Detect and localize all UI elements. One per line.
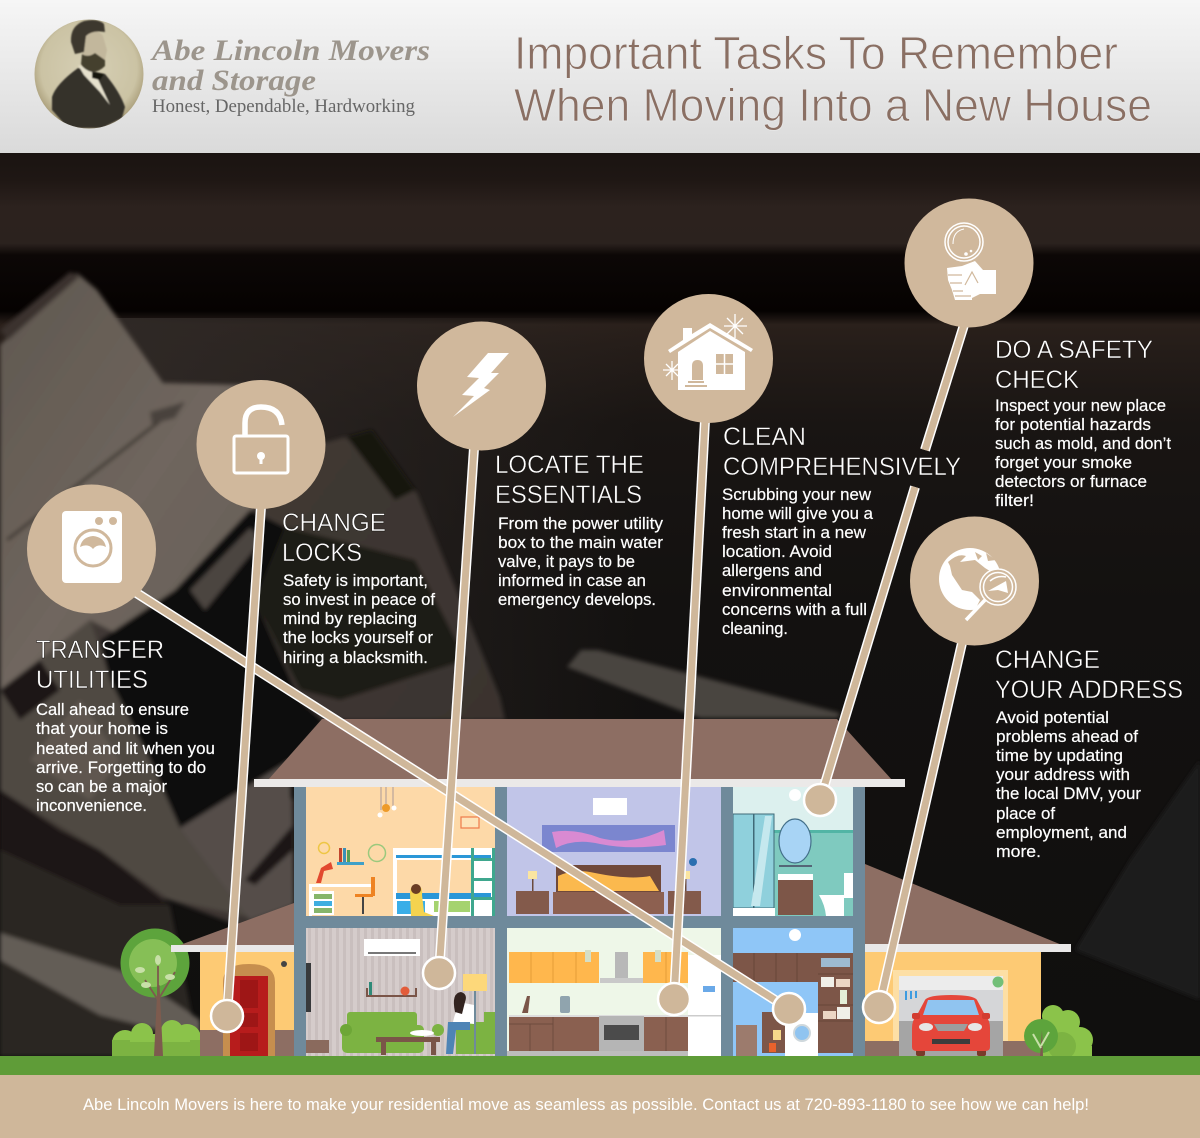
line: change address <box>879 643 962 1007</box>
text: transfer utilities: Call ahead to ensure <box>36 700 189 719</box>
text: clean comprehensively: home will give you a <box>722 504 874 523</box>
text: change your address: the local DMV, your <box>996 784 1141 803</box>
line: clean comprehensively <box>674 420 705 999</box>
text: change locks: mind by replacing <box>283 609 417 628</box>
line: transfer utilities <box>135 592 789 1009</box>
logo portrait of Abe Lincoln <box>34 20 144 128</box>
background photo of moving truck <box>0 153 1200 1056</box>
icon: red car <box>912 995 990 1056</box>
logo wordmark: and Storage <box>152 64 316 97</box>
logo wordmark <box>150 34 430 117</box>
connector lines <box>135 325 964 1016</box>
title: Important Tasks To Remember <box>514 27 1118 79</box>
text: change locks: CHANGE <box>282 509 386 537</box>
text: clean comprehensively: CLEAN <box>723 423 806 451</box>
logo wordmark: Honest, Dependable, Hardworking <box>152 96 415 117</box>
text: locate the essentials: valve, it pays to be <box>498 552 635 571</box>
title <box>514 27 1152 131</box>
ground strip <box>0 1056 1200 1075</box>
text: do a safety check: filter! <box>995 491 1034 510</box>
text: do a safety check <box>995 336 1171 510</box>
rooms <box>306 787 853 1056</box>
text: transfer utilities: TRANSFER <box>36 636 164 664</box>
text: change locks: the locks yourself or <box>283 628 433 647</box>
text: clean comprehensively: allergens and <box>722 561 822 580</box>
text: change your address: more. <box>996 842 1041 861</box>
left tree and bushes <box>112 928 201 1056</box>
text: change your address: Avoid potential <box>996 708 1109 727</box>
left annex <box>171 903 294 1056</box>
text: clean comprehensively: location. Avoid <box>722 542 832 561</box>
text: clean comprehensively: cleaning. <box>722 619 788 638</box>
text: transfer utilities: inconvenience. <box>36 796 147 815</box>
text: transfer utilities: that your home is <box>36 719 168 738</box>
icon circle: open padlock <box>196 380 326 509</box>
text: locate the essentials: ESSENTIALS <box>495 481 642 509</box>
text: change locks: so invest in peace of <box>283 590 435 609</box>
footer band: Abe Lincoln Movers is here to make your residential move as seamless as possible. Contact us at 720-893-1180 to see how we can help! <box>83 1095 1089 1114</box>
right tree <box>1024 1019 1058 1056</box>
text: locate the essentials: From the power utility <box>498 514 664 533</box>
icon circle: globe with magnifier <box>910 516 1039 646</box>
text: clean comprehensively: environmental <box>722 581 832 600</box>
icon circle: lightning bolt <box>417 322 546 450</box>
kids bedroom furniture <box>309 787 495 916</box>
text: change your address: your address with <box>996 765 1130 784</box>
icon circle: magnifying glass in hand <box>904 198 1034 328</box>
end dots <box>211 784 895 1032</box>
text: transfer utilities: UTILITIES <box>36 666 148 694</box>
text: locate the essentials: emergency develops. <box>498 590 656 609</box>
text: change your address: time by updating <box>996 746 1123 765</box>
living room furniture <box>306 939 495 1055</box>
right annex with garage <box>865 864 1071 1056</box>
text: change your address: employment, and <box>996 823 1127 842</box>
icon circle: clean house <box>644 294 773 423</box>
text: change your address: CHANGE <box>995 646 1100 674</box>
text: locate the essentials: informed in case an <box>498 571 646 590</box>
text: change your address: problems ahead of <box>996 727 1138 746</box>
logo wordmark: Abe Lincoln Movers <box>150 34 430 67</box>
text: transfer utilities <box>36 636 215 815</box>
main roof <box>268 719 892 780</box>
text: do a safety check: CHECK <box>995 366 1079 394</box>
text: locate the essentials <box>495 451 664 609</box>
text: change locks: LOCKS <box>282 539 362 567</box>
footer band <box>0 1075 1200 1138</box>
text: clean comprehensively: COMPREHENSIVELY <box>723 453 961 481</box>
line: safety check <box>820 325 964 800</box>
text: change your address: place of <box>996 804 1055 823</box>
text: do a safety check: Inspect your new place <box>995 396 1166 415</box>
kitchen <box>507 950 721 1056</box>
text: change your address: YOUR ADDRESS <box>995 676 1183 704</box>
bathroom fixtures <box>733 789 853 916</box>
text: do a safety check: for potential hazards <box>995 415 1151 434</box>
text: clean comprehensively: fresh start in a new <box>722 523 867 542</box>
text: locate the essentials: LOCATE THE <box>495 451 644 479</box>
text: transfer utilities: arrive. Forgetting to do <box>36 758 206 777</box>
text: locate the essentials: box to the main water <box>498 533 663 552</box>
text: clean comprehensively <box>722 423 961 638</box>
line: change locks <box>227 506 261 1016</box>
text: clean comprehensively: concerns with a full <box>722 600 867 619</box>
laundry room <box>733 929 853 1056</box>
structural walls <box>294 787 865 1056</box>
text: change locks <box>282 509 435 667</box>
text: clean comprehensively: Scrubbing your new <box>722 485 872 504</box>
main eave <box>254 779 905 787</box>
text: transfer utilities: heated and lit when you <box>36 739 215 758</box>
right bushes <box>1042 1005 1093 1060</box>
line: locate the essentials <box>439 448 474 973</box>
text: do a safety check: forget your smoke <box>995 453 1132 472</box>
icon circle: washing machine <box>27 484 156 614</box>
house illustration <box>112 719 1093 1060</box>
text: transfer utilities: so can be a major <box>36 777 167 796</box>
master bedroom furniture <box>516 798 701 914</box>
text: change locks: Safety is important, <box>283 571 428 590</box>
title: When Moving Into a New House <box>514 79 1152 131</box>
text: do a safety check: detectors or furnace <box>995 472 1147 491</box>
header band <box>0 0 1200 153</box>
text: do a safety check: DO A SAFETY <box>995 336 1153 364</box>
text: change your address <box>995 646 1183 861</box>
text: change locks: hiring a blacksmith. <box>283 648 428 667</box>
text: do a safety check: such as mold, and don’t <box>995 434 1171 453</box>
